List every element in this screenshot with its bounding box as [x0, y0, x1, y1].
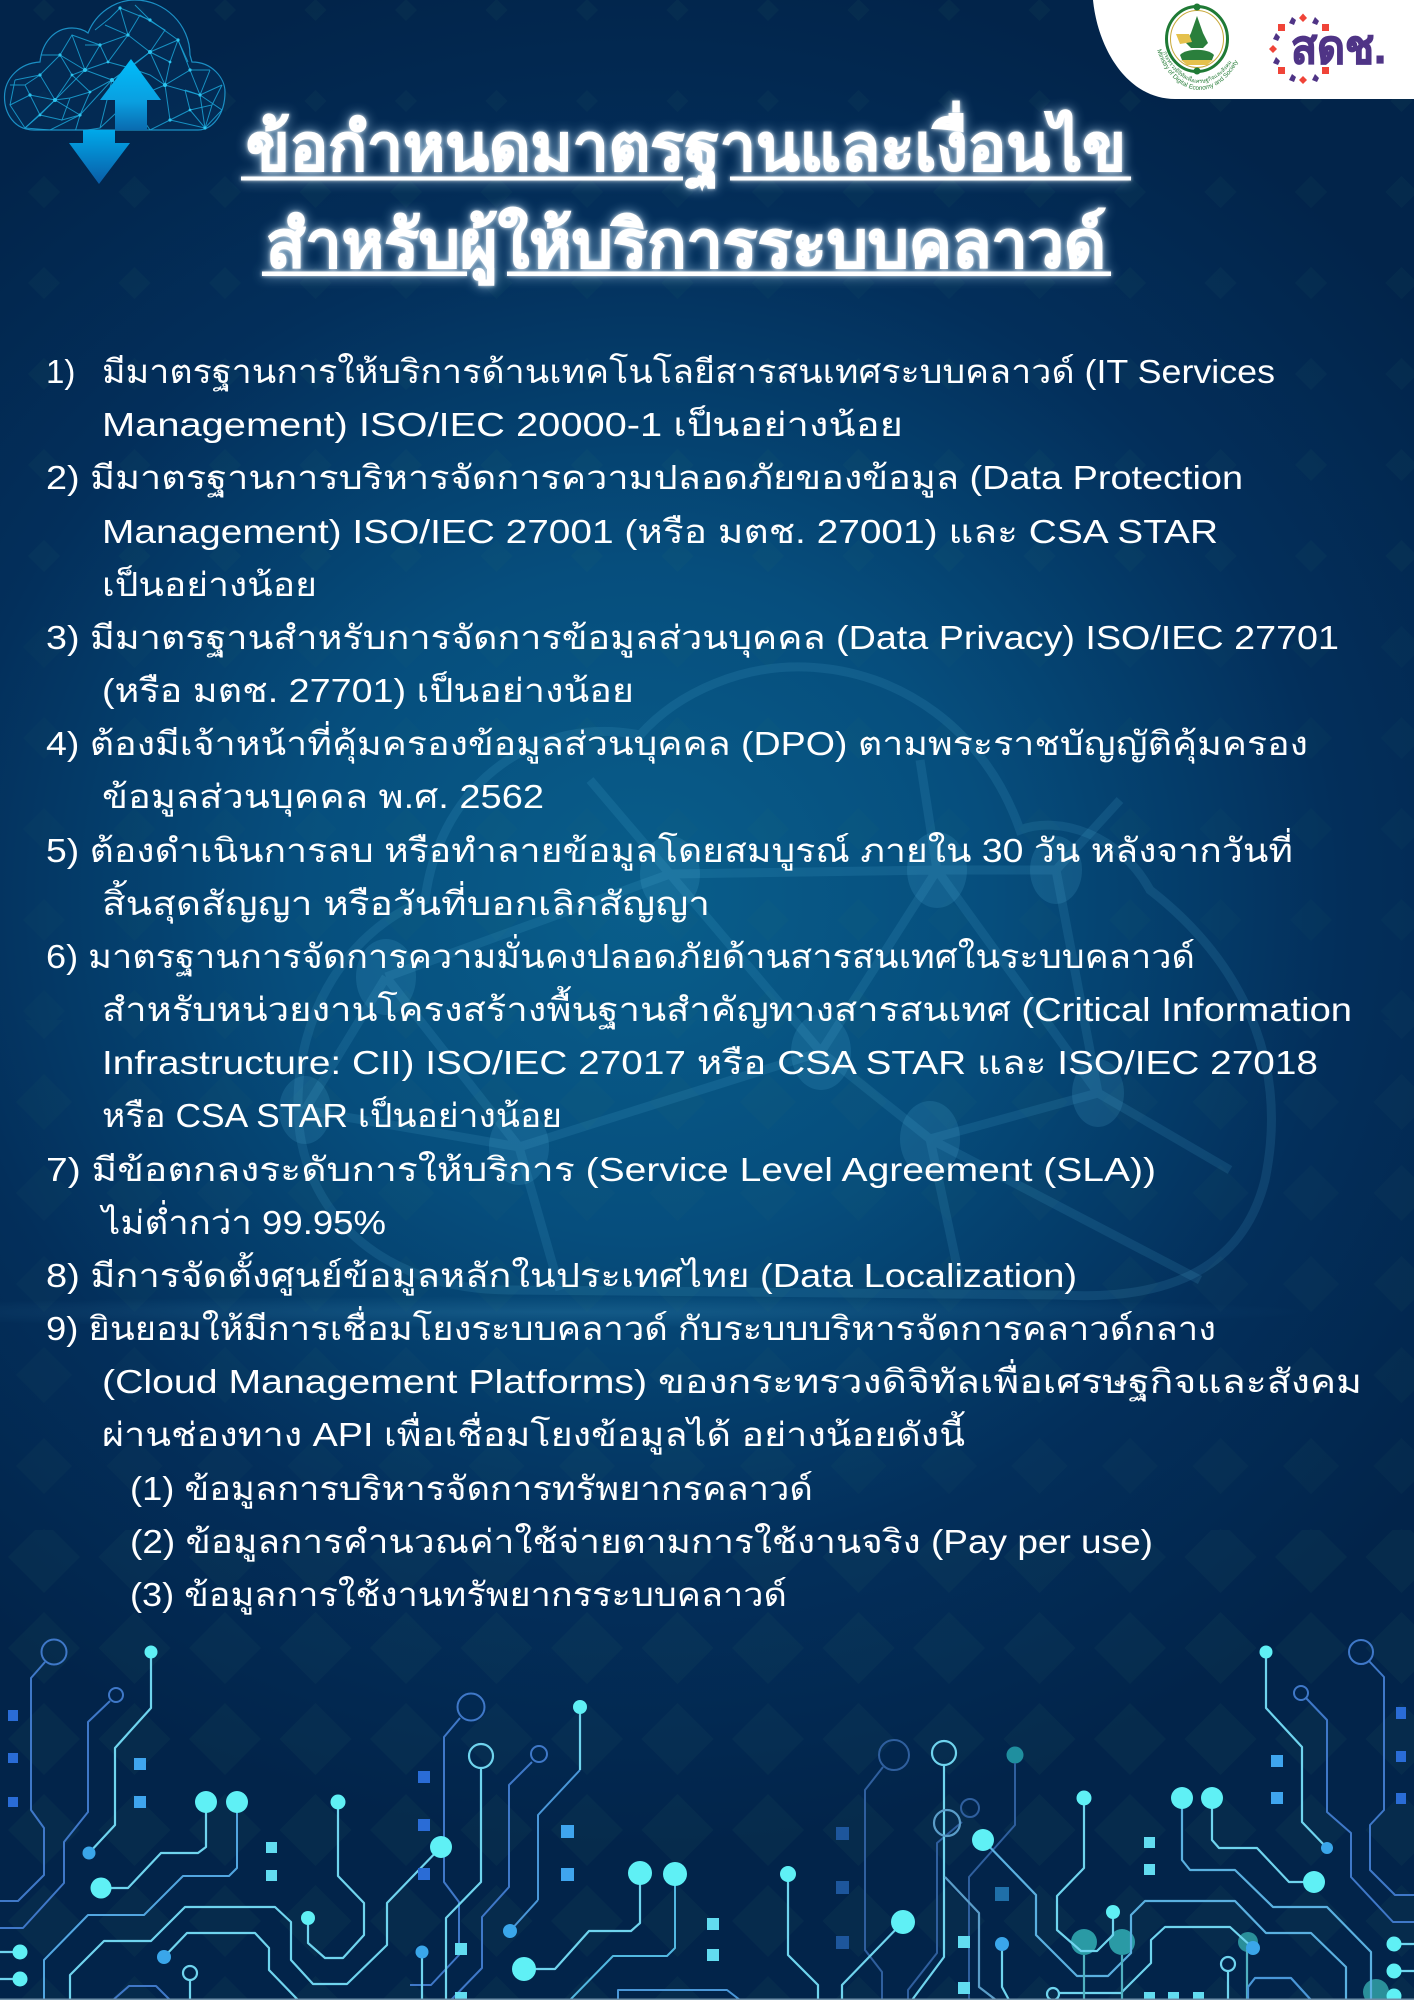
item 2: 2) มีมาตรฐานการบริหารจัดการความปลอดภัยของข้อมูล (Data Protection — [46, 459, 1243, 498]
item 2 — [46, 459, 1243, 603]
text block: conditions list — [46, 353, 1362, 1615]
item 7: 7) มีข้อตกลงระดับการให้บริการ (Service Level Agreement (SLA)) — [46, 1151, 1156, 1188]
logo: Ministry of Digital Economy and Society emblem — [1157, 4, 1238, 90]
item 9: ผ่านช่องทาง API เพื่อเชื่อมโยงข้อมูลได้ อย่างน้อยดังนี้ — [102, 1411, 966, 1455]
item 5: สิ้นสุดสัญญา หรือวันที่บอกเลิกสัญญา — [102, 880, 710, 924]
item 2: Management) ISO/IEC 27001 (หรือ มตช. 27001) และ CSA STAR — [102, 513, 1218, 550]
item 3: (หรือ มตช. 27701) เป็นอย่างน้อย — [102, 671, 634, 709]
title line 2: สำหรับผู้ให้บริการระบบคลาวด์ — [266, 205, 1106, 286]
logo: Ministry of Digital Economy and Society emblem: Ministry of Digital Economy and Society — [1157, 49, 1238, 90]
item 9 — [46, 1306, 1362, 1615]
item 5 — [46, 828, 1293, 924]
item 2: เป็นอย่างน้อย — [102, 565, 317, 603]
item 1: 1) — [46, 353, 75, 390]
item 9: 9) ยินยอมให้มีการเชื่อมโยงระบบคลาวด์ กับระบบบริหารจัดการคลาวด์กลาง — [46, 1306, 1216, 1347]
icon: up arrow — [100, 59, 161, 130]
logo: สดช. — [1269, 14, 1386, 84]
icon: down arrow — [69, 130, 130, 184]
item 9: (3) ข้อมูลการใช้งานทรัพยากรระบบคลาวด์ — [130, 1576, 787, 1615]
item 3 — [46, 619, 1339, 709]
item 6: สำหรับหน่วยงานโครงสร้างพื้นฐานสำคัญทางสารสนเทศ (Critical Information — [102, 986, 1352, 1030]
title — [241, 100, 1131, 286]
item 5: 5) ต้องดำเนินการลบ หรือทำลายข้อมูลโดยสมบูรณ์ ภายใน 30 วัน หลังจากวันที่ — [46, 828, 1293, 871]
logo: สดช.: สดช. — [1291, 21, 1386, 73]
item 7: ไม่ต่ำกว่า 99.95% — [99, 1200, 386, 1241]
title line 1: ข้อกำหนดมาตรฐานและเงื่อนไข — [246, 100, 1126, 190]
item 6 — [46, 934, 1352, 1134]
item 4 — [46, 721, 1308, 817]
item 1 — [46, 353, 1275, 443]
item 1: มีมาตรฐานการให้บริการด้านเทคโนโลยีสารสนเทศระบบคลาวด์ (IT Services — [102, 353, 1275, 392]
icon: cloud with upload and download arrows — [4, 0, 225, 184]
item 9: (Cloud Management Platforms) ของกระทรวงดิจิทัลเพื่อเศรษฐกิจและสังคม — [102, 1359, 1362, 1402]
item 4: ข้อมูลส่วนบุคคล พ.ศ. 2562 — [102, 778, 544, 817]
item 6: หรือ CSA STAR เป็นอย่างน้อย — [102, 1096, 562, 1134]
item 3: 3) มีมาตรฐานสำหรับการจัดการข้อมูลส่วนบุคคล (Data Privacy) ISO/IEC 27701 — [46, 619, 1339, 658]
item 7 — [46, 1151, 1156, 1241]
item 9: (1) ข้อมูลการบริหารจัดการทรัพยากรคลาวด์ — [130, 1470, 813, 1509]
item 6: 6) มาตรฐานการจัดการความมั่นคงปลอดภัยด้านสารสนเทศในระบบคลาวด์ — [46, 934, 1195, 977]
decoration: circuit board traces right — [707, 1640, 1414, 2000]
item 1: Management) ISO/IEC 20000-1 เป็นอย่างน้อย — [102, 405, 903, 443]
item 9: (2) ข้อมูลการคำนวณค่าใช้จ่ายตามการใช้งานจริง (Pay per use) — [130, 1523, 1153, 1562]
item 4: 4) ต้องมีเจ้าหน้าที่คุ้มครองข้อมูลส่วนบุคคล (DPO) ตามพระราชบัญญัติคุ้มครอง — [46, 721, 1308, 764]
decoration: circuit board traces left — [0, 1640, 740, 2000]
item 6: Infrastructure: CII) ISO/IEC 27017 หรือ CSA STAR และ ISO/IEC 27018 — [102, 1044, 1318, 1081]
logo: Ministry of Digital Economy and Society emblem: กระทรวงดิจิทัลเพื่อเศรษฐกิจและสังคม — [1163, 52, 1232, 84]
logo panel: top right white tab — [1093, 0, 1414, 99]
item 8: 8) มีการจัดตั้งศูนย์ข้อมูลหลักในประเทศไทย (Data Localization) — [46, 1252, 1077, 1296]
watermark: large network cloud — [279, 667, 1271, 1296]
